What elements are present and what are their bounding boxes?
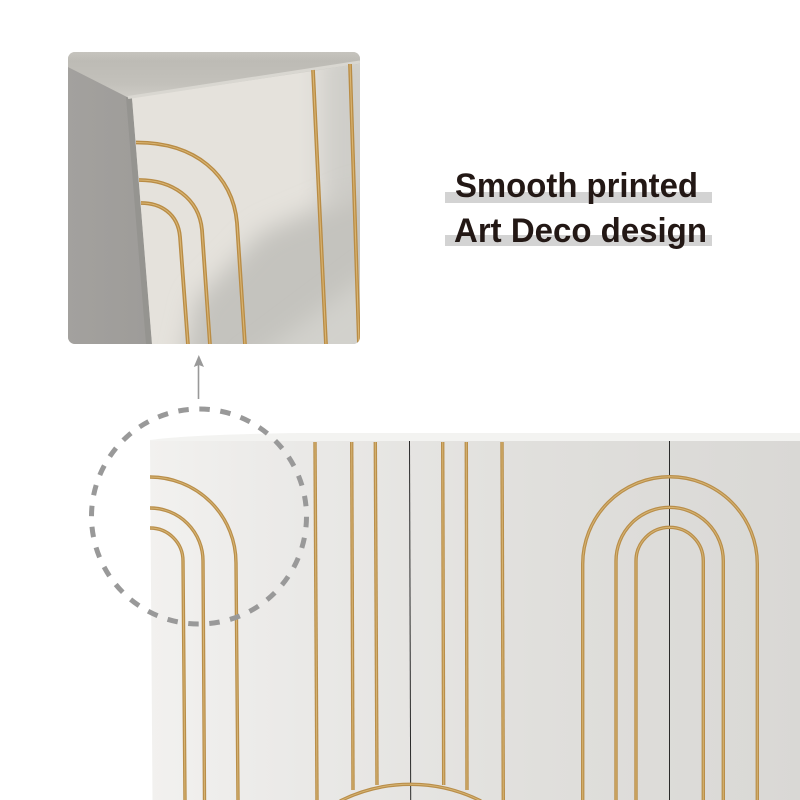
arrow pointing to inset [194, 355, 204, 399]
heading line 1: Smooth printed [455, 167, 698, 205]
cabinet top surface [68, 52, 360, 84]
heading with highlight bars [445, 167, 712, 250]
highlight bar 2 [445, 235, 712, 246]
panel: cabinet front view [150, 433, 800, 800]
cabinet front surface with shadow [132, 64, 360, 344]
side edge strip [126, 97, 152, 344]
door seams [410, 441, 670, 800]
gold inlay lines, cabinet [150, 442, 757, 800]
heading line 2: Art Deco design [454, 212, 707, 250]
panel: zoomed corner detail [68, 52, 360, 344]
dashed magnifier circle [92, 409, 306, 624]
front top edge highlight [128, 62, 360, 98]
cabinet front [150, 441, 800, 800]
highlight bar 1 [445, 192, 712, 203]
gold inlay lines, inset [136, 64, 359, 345]
cabinet side surface [68, 67, 148, 344]
cabinet top lip [150, 433, 800, 442]
